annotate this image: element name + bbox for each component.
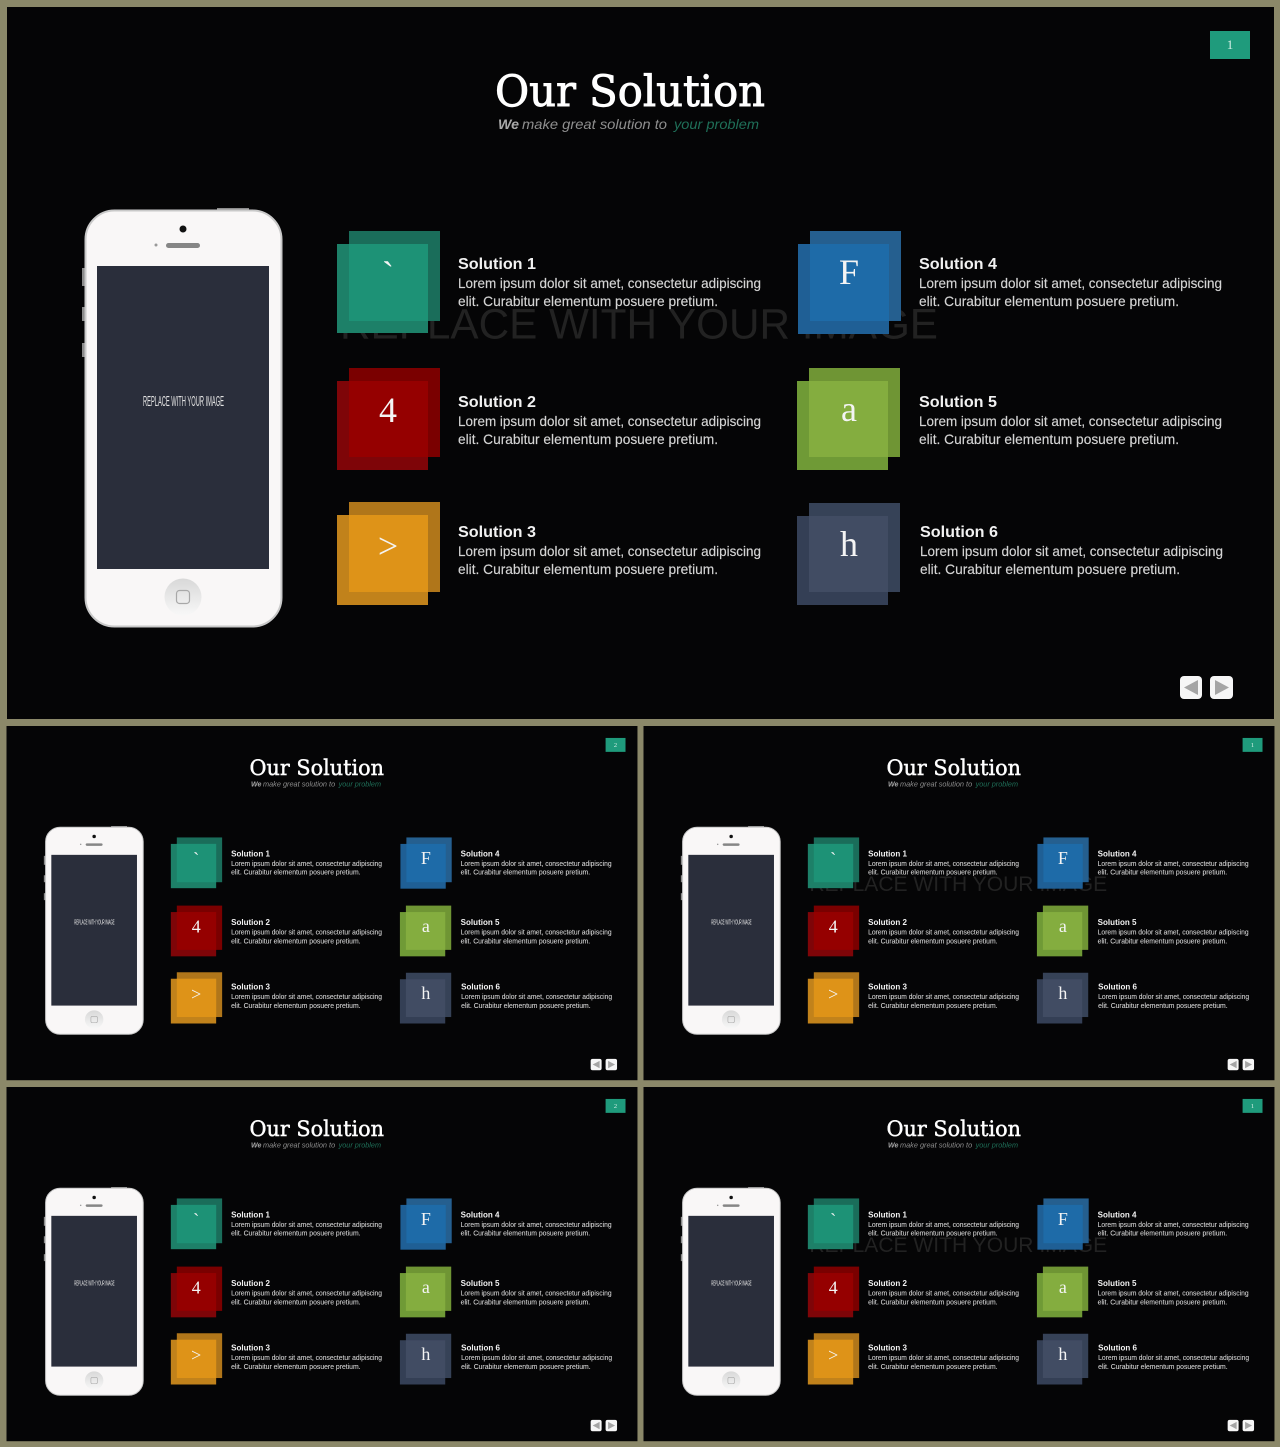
- subtitle: [498, 116, 759, 132]
- solution 5: [400, 1267, 612, 1317]
- solution 6: h: [1058, 1344, 1067, 1364]
- solution 4: F: [1058, 1209, 1068, 1229]
- solution 2: [808, 1267, 1019, 1317]
- solution 1: elit. Curabitur elementum posuere pretium.: [231, 1231, 361, 1238]
- solution 1: `: [193, 1210, 199, 1230]
- solution 4: [1037, 837, 1249, 889]
- subtitle: your problem: [673, 116, 759, 132]
- solution 6: [797, 503, 1223, 605]
- subtitle: your problem: [975, 1143, 1018, 1150]
- solution 1: Lorem ipsum dolor sit amet, consectetur adipiscing: [868, 861, 1019, 868]
- solution 4: Solution 4: [461, 849, 500, 858]
- solution 5: [400, 906, 612, 956]
- subtitle: make great solution to: [900, 1143, 972, 1150]
- solution 1: Solution 1: [231, 1210, 271, 1219]
- solution 6: elit. Curabitur elementum posuere pretium.: [461, 1003, 591, 1010]
- page number badge: 1: [1251, 742, 1254, 749]
- solution 2: [808, 906, 1019, 956]
- solution 4: F: [839, 252, 859, 292]
- solution 2: Solution 2: [868, 1279, 908, 1288]
- solution 3: Lorem ipsum dolor sit amet, consectetur adipiscing: [868, 994, 1019, 1001]
- page number badge: [1243, 738, 1263, 752]
- solution 5: elit. Curabitur elementum posuere pretium.: [461, 938, 590, 945]
- subtitle: your problem: [975, 782, 1018, 789]
- solution 5: a: [422, 1277, 430, 1297]
- solution 3: [171, 1333, 382, 1385]
- solution 2: 4: [829, 1277, 838, 1297]
- page number badge: [1243, 1099, 1263, 1113]
- solution 5: a: [1059, 916, 1067, 936]
- solution 4: Lorem ipsum dolor sit amet, consectetur adipiscing: [919, 275, 1222, 291]
- solution 4: Lorem ipsum dolor sit amet, consectetur adipiscing: [1098, 861, 1249, 868]
- title: Our Solution: [887, 1117, 1021, 1142]
- solution 3: elit. Curabitur elementum posuere pretium.: [868, 1364, 998, 1371]
- solution 4: elit. Curabitur elementum posuere pretium.: [1098, 1231, 1227, 1238]
- solution 5: a: [1059, 1277, 1067, 1297]
- solution 2: elit. Curabitur elementum posuere pretium.: [868, 1299, 998, 1306]
- page number badge: 1: [1251, 1103, 1254, 1110]
- solution 2: [171, 906, 382, 956]
- solution 5: elit. Curabitur elementum posuere pretium.: [1098, 1299, 1227, 1306]
- solution 3: >: [378, 526, 398, 566]
- subtitle: your problem: [338, 782, 381, 789]
- slide 1: large preview: [7, 7, 1274, 719]
- solution 3: Lorem ipsum dolor sit amet, consectetur adipiscing: [231, 1355, 382, 1362]
- solution 3: Solution 3: [868, 1344, 908, 1353]
- watermark: REPLACE WITH YOUR IMAGE: [809, 872, 1107, 896]
- phone mockup: REPLACE WITH YOUR IMAGE: [711, 1279, 752, 1288]
- solution 3: elit. Curabitur elementum posuere pretium.: [868, 1003, 998, 1010]
- solution 3: Solution 3: [231, 983, 271, 992]
- solution 2: Lorem ipsum dolor sit amet, consectetur adipiscing: [868, 1290, 1019, 1297]
- solution 3: >: [191, 1345, 201, 1365]
- solution 4: Solution 4: [919, 256, 997, 273]
- solution 4: Solution 4: [1098, 849, 1137, 858]
- solution 2: elit. Curabitur elementum posuere pretium.: [231, 938, 361, 945]
- solution 3: elit. Curabitur elementum posuere pretium.: [458, 561, 718, 577]
- solution 3: elit. Curabitur elementum posuere pretium.: [231, 1003, 361, 1010]
- slide 3: small preview with watermark: [644, 726, 1274, 1080]
- solution 1: Lorem ipsum dolor sit amet, consectetur adipiscing: [231, 861, 382, 868]
- title: Our Solution: [887, 756, 1021, 781]
- solution 2: Lorem ipsum dolor sit amet, consectetur adipiscing: [868, 929, 1019, 936]
- navigation arrows: [591, 1059, 617, 1070]
- solution 4: Solution 4: [1098, 1210, 1137, 1219]
- solution 1: elit. Curabitur elementum posuere pretium.: [868, 1231, 998, 1238]
- solution 2: Solution 2: [231, 1279, 271, 1288]
- solution 2: [171, 1267, 382, 1317]
- solution 5: Lorem ipsum dolor sit amet, consectetur adipiscing: [461, 929, 612, 936]
- solution 3: Solution 3: [458, 524, 536, 541]
- solution 6: Lorem ipsum dolor sit amet, consectetur adipiscing: [1098, 1355, 1249, 1362]
- title: Our Solution: [250, 756, 384, 781]
- solution 2: elit. Curabitur elementum posuere pretium.: [231, 1299, 361, 1306]
- solution 5: elit. Curabitur elementum posuere pretium.: [1098, 938, 1227, 945]
- solution 4: F: [421, 1209, 431, 1229]
- subtitle: We: [251, 782, 262, 789]
- solution 2: Solution 2: [868, 918, 908, 927]
- watermark: REPLACE WITH YOUR IMAGE: [340, 300, 938, 348]
- solution 2: Lorem ipsum dolor sit amet, consectetur adipiscing: [231, 1290, 382, 1297]
- solution 2: Lorem ipsum dolor sit amet, consectetur adipiscing: [458, 413, 761, 429]
- solution 4: elit. Curabitur elementum posuere pretium.: [461, 1231, 590, 1238]
- slide 2: small preview: [6, 726, 637, 1080]
- solution 6: Lorem ipsum dolor sit amet, consectetur adipiscing: [461, 994, 612, 1001]
- solution 6: [400, 1334, 612, 1385]
- solution 4: F: [1058, 848, 1068, 868]
- phone mockup: [44, 826, 143, 1034]
- solution 6: Solution 6: [461, 983, 501, 992]
- solution 6: h: [840, 524, 858, 564]
- solution 1: elit. Curabitur elementum posuere pretium.: [868, 870, 998, 877]
- solution 5: Solution 5: [919, 394, 997, 411]
- solution 3: Lorem ipsum dolor sit amet, consectetur adipiscing: [868, 1355, 1019, 1362]
- solution 5: elit. Curabitur elementum posuere pretium.: [461, 1299, 590, 1306]
- solution 2: 4: [192, 916, 201, 936]
- solution 3: [337, 502, 761, 605]
- solution 6: elit. Curabitur elementum posuere pretium.: [920, 561, 1180, 577]
- phone mockup: [681, 1187, 780, 1395]
- phone mockup: [82, 208, 282, 626]
- solution 3: [808, 1333, 1019, 1385]
- solution 2: 4: [192, 1277, 201, 1297]
- solution 1: `: [193, 849, 199, 869]
- solution 6: Solution 6: [1098, 1344, 1138, 1353]
- solution 4: elit. Curabitur elementum posuere pretium.: [1098, 870, 1227, 877]
- navigation arrows: [1228, 1420, 1254, 1431]
- solution 6: Solution 6: [920, 524, 998, 541]
- solution 4: [798, 231, 1222, 334]
- solution 6: [400, 973, 612, 1024]
- solution 5: [1037, 906, 1249, 956]
- subtitle: [888, 782, 1018, 789]
- solution 1: elit. Curabitur elementum posuere pretium.: [458, 293, 718, 309]
- phone mockup: REPLACE WITH YOUR IMAGE: [143, 393, 224, 410]
- solution 5: Lorem ipsum dolor sit amet, consectetur adipiscing: [461, 1290, 612, 1297]
- solution 4: elit. Curabitur elementum posuere pretium.: [919, 293, 1179, 309]
- solution 5: Solution 5: [461, 1279, 500, 1288]
- solution 4: F: [421, 848, 431, 868]
- solution 2: Solution 2: [231, 918, 271, 927]
- subtitle: We: [888, 1143, 899, 1150]
- solution 5: Solution 5: [1098, 918, 1137, 927]
- solution 3: Solution 3: [231, 1344, 271, 1353]
- phone mockup: REPLACE WITH YOUR IMAGE: [711, 918, 752, 927]
- solution 4: [400, 1198, 612, 1250]
- slide 5: small preview with watermark: [644, 1087, 1274, 1441]
- solution 5: Lorem ipsum dolor sit amet, consectetur adipiscing: [919, 413, 1222, 429]
- solution 1: `: [830, 1210, 836, 1230]
- solution 1: [808, 837, 1019, 888]
- solution 2: Lorem ipsum dolor sit amet, consectetur adipiscing: [231, 929, 382, 936]
- subtitle: make great solution to: [900, 782, 972, 789]
- solution 1: Solution 1: [458, 256, 536, 273]
- solution 3: Solution 3: [868, 983, 908, 992]
- solution 3: [808, 972, 1019, 1024]
- solution 6: [1037, 1334, 1249, 1385]
- page number badge: 1: [1227, 37, 1233, 52]
- solution 4: Lorem ipsum dolor sit amet, consectetur adipiscing: [1098, 1222, 1249, 1229]
- solution 6: elit. Curabitur elementum posuere pretium.: [461, 1364, 591, 1371]
- title: Our Solution: [495, 67, 765, 117]
- solution 4: [400, 837, 612, 889]
- phone mockup: REPLACE WITH YOUR IMAGE: [74, 1279, 115, 1288]
- solution 5: [1037, 1267, 1249, 1317]
- subtitle: [888, 1143, 1018, 1150]
- solution 6: h: [421, 1344, 430, 1364]
- solution 2: Solution 2: [458, 394, 536, 411]
- solution 1: elit. Curabitur elementum posuere pretium.: [231, 870, 361, 877]
- solution 1: [337, 231, 761, 333]
- solution 1: Lorem ipsum dolor sit amet, consectetur adipiscing: [458, 275, 761, 291]
- phone mockup: [44, 1187, 143, 1395]
- solution 2: 4: [829, 916, 838, 936]
- solution 1: Solution 1: [231, 849, 271, 858]
- navigation arrows: [1228, 1059, 1254, 1070]
- solution 3: >: [828, 1345, 838, 1365]
- solution 1: `: [830, 849, 836, 869]
- solution 1: [808, 1198, 1019, 1249]
- solution 6: h: [421, 983, 430, 1003]
- page number badge: [606, 738, 626, 752]
- solution 2: elit. Curabitur elementum posuere pretium.: [458, 431, 718, 447]
- solution 6: Lorem ipsum dolor sit amet, consectetur adipiscing: [920, 543, 1223, 559]
- solution 2: elit. Curabitur elementum posuere pretium.: [868, 938, 998, 945]
- solution 4: [1037, 1198, 1249, 1250]
- solution 4: Lorem ipsum dolor sit amet, consectetur adipiscing: [461, 861, 612, 868]
- solution 3: >: [828, 984, 838, 1004]
- solution 5: Solution 5: [461, 918, 500, 927]
- navigation arrows: [1180, 676, 1233, 699]
- phone mockup: REPLACE WITH YOUR IMAGE: [74, 918, 115, 927]
- solution 6: elit. Curabitur elementum posuere pretium.: [1098, 1364, 1228, 1371]
- solution 3: elit. Curabitur elementum posuere pretium.: [231, 1364, 361, 1371]
- subtitle: make great solution to: [263, 782, 335, 789]
- subtitle: [251, 1143, 381, 1150]
- solution 1: Solution 1: [868, 1210, 908, 1219]
- page number badge: [1210, 31, 1250, 59]
- solution 5: a: [422, 916, 430, 936]
- watermark: REPLACE WITH YOUR IMAGE: [809, 1233, 1107, 1257]
- subtitle: [251, 782, 381, 789]
- solution 3: >: [191, 984, 201, 1004]
- solution 6: h: [1058, 983, 1067, 1003]
- solution 5: Lorem ipsum dolor sit amet, consectetur adipiscing: [1098, 1290, 1249, 1297]
- slide 4: small preview: [6, 1087, 637, 1441]
- title: Our Solution: [250, 1117, 384, 1142]
- solution 1: Lorem ipsum dolor sit amet, consectetur adipiscing: [868, 1222, 1019, 1229]
- solution 6: Lorem ipsum dolor sit amet, consectetur adipiscing: [1098, 994, 1249, 1001]
- solution 2: [337, 368, 761, 470]
- subtitle: your problem: [338, 1143, 381, 1150]
- solution 4: elit. Curabitur elementum posuere pretium.: [461, 870, 590, 877]
- solution 5: [797, 368, 1222, 470]
- solution 6: elit. Curabitur elementum posuere pretium.: [1098, 1003, 1228, 1010]
- page number badge: 2: [614, 742, 617, 749]
- solution 6: Solution 6: [1098, 983, 1138, 992]
- solution 5: elit. Curabitur elementum posuere pretium.: [919, 431, 1179, 447]
- solution 3: Lorem ipsum dolor sit amet, consectetur adipiscing: [458, 543, 761, 559]
- solution 5: Solution 5: [1098, 1279, 1137, 1288]
- navigation arrows: [591, 1420, 617, 1431]
- subtitle: make great solution to: [522, 116, 667, 132]
- solution 1: `: [382, 254, 394, 294]
- subtitle: We: [888, 782, 899, 789]
- solution 1: Solution 1: [868, 849, 908, 858]
- subtitle: We: [498, 116, 519, 132]
- page number badge: 2: [614, 1103, 617, 1110]
- solution 4: Solution 4: [461, 1210, 500, 1219]
- solution 4: Lorem ipsum dolor sit amet, consectetur adipiscing: [461, 1222, 612, 1229]
- solution 5: a: [841, 389, 857, 429]
- subtitle: We: [251, 1143, 262, 1150]
- subtitle: make great solution to: [263, 1143, 335, 1150]
- solution 6: [1037, 973, 1249, 1024]
- phone mockup: [681, 826, 780, 1034]
- solution 1: Lorem ipsum dolor sit amet, consectetur adipiscing: [231, 1222, 382, 1229]
- solution 3: Lorem ipsum dolor sit amet, consectetur adipiscing: [231, 994, 382, 1001]
- solution 6: Lorem ipsum dolor sit amet, consectetur adipiscing: [461, 1355, 612, 1362]
- solution 5: Lorem ipsum dolor sit amet, consectetur adipiscing: [1098, 929, 1249, 936]
- solution 3: [171, 972, 382, 1024]
- solution 6: Solution 6: [461, 1344, 501, 1353]
- solution 2: 4: [379, 390, 397, 430]
- page number badge: [606, 1099, 626, 1113]
- solution 1: [171, 1198, 382, 1249]
- solution 1: [171, 837, 382, 888]
